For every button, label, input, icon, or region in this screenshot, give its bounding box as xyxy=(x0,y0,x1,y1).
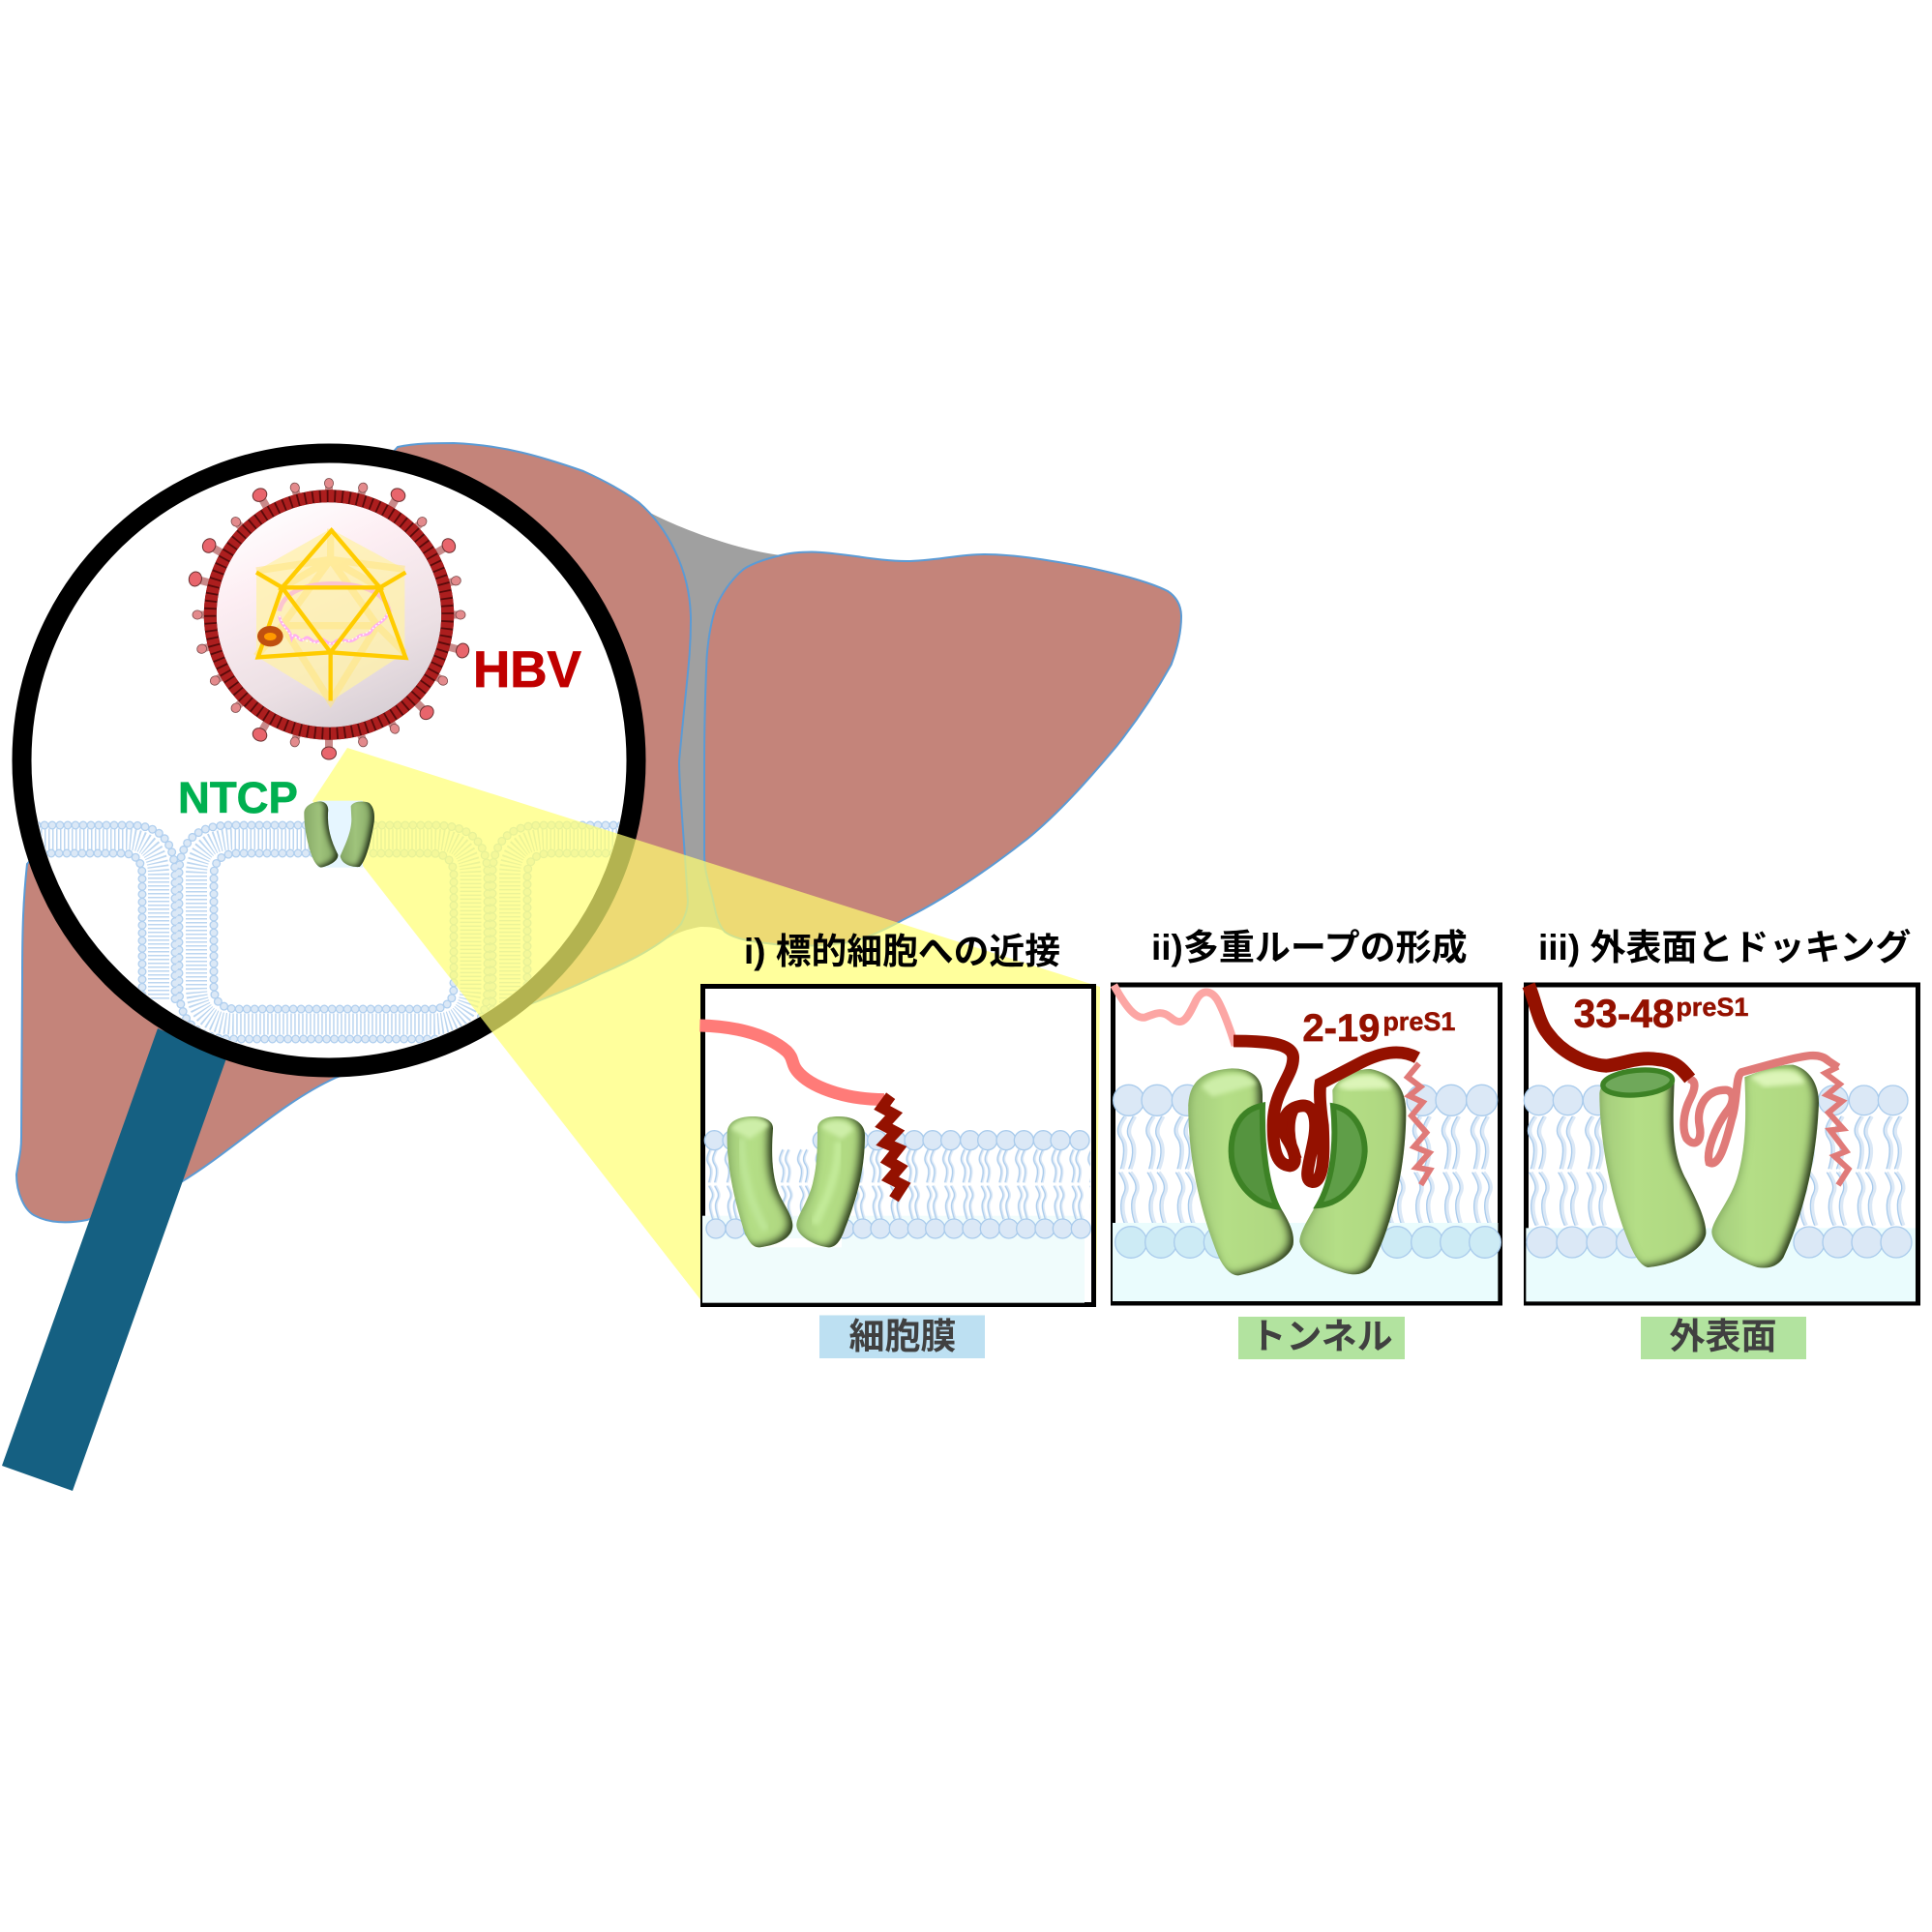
panel iii frame xyxy=(1527,985,1917,1303)
panel iii: docking with outer surface xyxy=(1524,928,1917,1359)
panel ii frame xyxy=(1113,985,1500,1303)
panel i heading: i) 標的細胞への近接 xyxy=(744,932,1060,971)
label: 2-19 preS1 xyxy=(1302,1007,1455,1050)
panel ii caption: tunnel: トンネル xyxy=(1250,1317,1393,1356)
virus: interior xyxy=(216,501,442,728)
NTCP label: NTCP xyxy=(178,773,298,822)
yellow zoom beam xyxy=(312,748,1100,1307)
panel iii caption: outer surface xyxy=(1641,1317,1806,1359)
panel iii drawing xyxy=(1524,985,1916,1301)
liver: gray ligament between lobes xyxy=(639,513,781,942)
liver xyxy=(16,443,1181,1222)
label: 33-48 preS1 xyxy=(1574,992,1748,1036)
HBV virus particle xyxy=(188,478,470,759)
label: 2-19 preS1: preS1 xyxy=(1382,1007,1455,1036)
virus: envelope ring xyxy=(210,496,448,733)
panel i frame xyxy=(702,987,1093,1304)
liver: left lobe xyxy=(16,443,691,1222)
infographic canvas xyxy=(2,442,1920,1491)
panel i: approach to target cell xyxy=(699,932,1093,1358)
panel ii drawing xyxy=(1113,985,1501,1301)
label: 2-19 preS1: 2-19 xyxy=(1302,1007,1380,1050)
label: 33-48 preS1: 33-48 xyxy=(1574,992,1675,1036)
virus: capsid icosahedron xyxy=(256,529,405,701)
label: 33-48 preS1: preS1 xyxy=(1676,993,1748,1022)
NTCP small channel in membrane xyxy=(304,801,374,868)
cell membrane inside lens xyxy=(29,825,629,1039)
panel ii: multiple loop formation xyxy=(1113,928,1501,1359)
magnifier lens interior xyxy=(29,461,629,1060)
HBV label: HBV xyxy=(473,641,581,698)
panel iii caption: outer surface: 外表面 xyxy=(1670,1317,1776,1356)
virus: spikes xyxy=(188,478,470,759)
magnifier handle xyxy=(2,1028,226,1491)
panel i caption: cell membrane xyxy=(819,1316,985,1358)
panel i caption: cell membrane: 細胞膜 xyxy=(849,1317,956,1356)
panel ii heading: ii)多重ループの形成 xyxy=(1151,928,1468,967)
liver: right lobe xyxy=(704,551,1181,946)
magnifier ring xyxy=(21,453,637,1068)
panel iii heading: iii) 外表面とドッキング xyxy=(1538,928,1911,967)
panel i drawing xyxy=(699,1025,1090,1303)
